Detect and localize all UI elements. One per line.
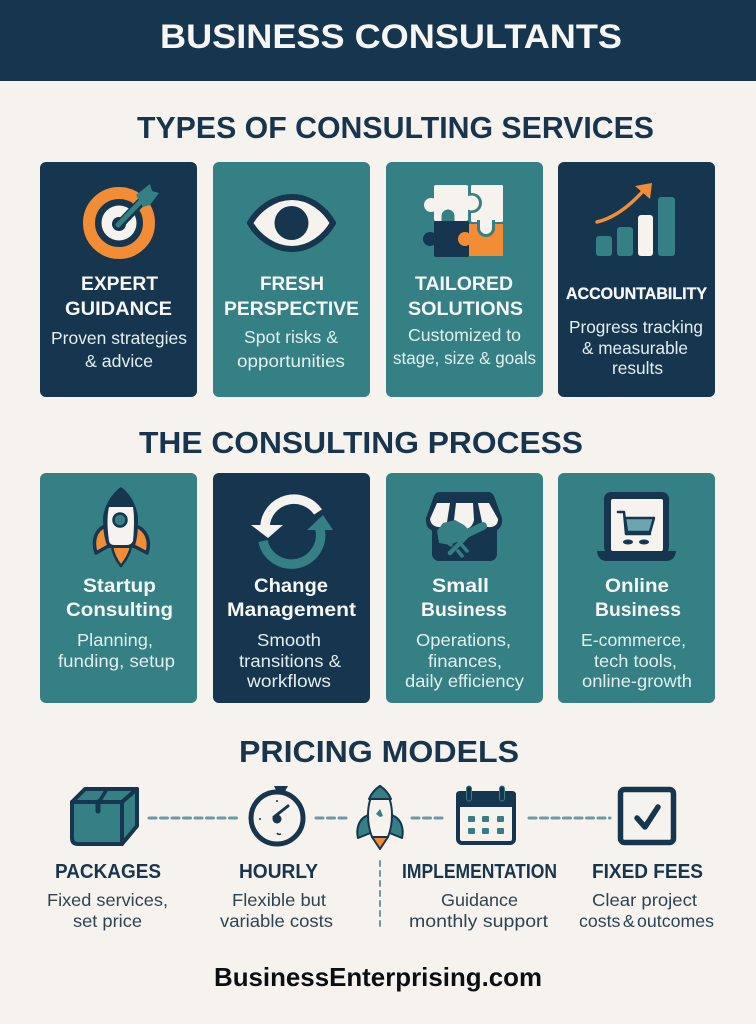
card text: E-commerce, xyxy=(581,630,686,650)
icon: cycle arrows xyxy=(251,499,333,564)
icon: stopwatch xyxy=(251,786,303,844)
icon: eye xyxy=(250,197,333,249)
item title: HOURLY xyxy=(239,861,319,883)
card title: Change xyxy=(254,575,328,597)
panel: expert guidance: GUIDANCE xyxy=(65,298,172,320)
item title: FIXED FEES xyxy=(592,861,703,883)
pricing: packages xyxy=(47,789,168,931)
footer: website: BusinessEnterprising.com xyxy=(214,962,542,992)
panel: expert guidance xyxy=(40,162,197,397)
panel: fresh perspective xyxy=(213,162,370,397)
panel: tailored solutions: stage, size & goals xyxy=(393,348,536,368)
card title: Startup xyxy=(83,575,156,597)
heading: types of consulting services: TYPES OF CONSULTING SERVICES xyxy=(137,110,654,145)
card text: Smooth xyxy=(257,630,321,650)
icon: rocket xyxy=(94,487,148,566)
panel: accountability: results xyxy=(612,358,663,378)
card text: Spot risks & xyxy=(244,327,338,347)
panel: change management: workflows xyxy=(246,671,331,691)
panel: startup consulting: funding, setup xyxy=(58,651,175,671)
card title: TAILORED xyxy=(415,273,513,295)
panel: online business: Business xyxy=(595,599,681,621)
panel: small business: Business xyxy=(421,599,507,621)
card text: Progress tracking xyxy=(569,317,703,337)
icon: target with dart xyxy=(89,184,159,253)
heading: the consulting process: THE CONSULTING PROCESS xyxy=(139,425,583,460)
panel: fresh perspective: opportunities xyxy=(237,351,345,371)
panel: small business xyxy=(386,473,543,703)
heading: pricing models: PRICING MODELS xyxy=(239,734,519,769)
card text: Planning, xyxy=(77,630,153,650)
pricing: implementation xyxy=(402,786,557,931)
card text: Operations, xyxy=(416,630,511,650)
icon: laptop with cart xyxy=(597,492,676,561)
item title: IMPLEMENTATION xyxy=(402,861,557,883)
icon: checkbox xyxy=(620,790,674,842)
pricing: hourly: variable costs xyxy=(220,911,333,931)
item text: Fixed services, xyxy=(47,890,168,910)
icon: calendar xyxy=(456,786,516,843)
card title: ACCOUNTABILITY xyxy=(566,284,708,303)
pricing: fixed fees xyxy=(579,790,714,931)
header banner xyxy=(0,0,756,81)
panel: online business: tech tools, xyxy=(594,651,677,671)
item text: Flexible but xyxy=(232,890,326,910)
pricing: implementation: monthly support xyxy=(409,911,548,931)
panel: change management xyxy=(213,473,370,703)
item text: Clear project xyxy=(592,890,697,910)
panel: change management: Management xyxy=(227,599,357,621)
panel: accountability: & measurable xyxy=(582,338,688,358)
card title: Online xyxy=(605,575,669,597)
icon: puzzle pieces xyxy=(423,185,503,257)
pricing: fixed fees: costs & outcomes xyxy=(579,911,714,931)
panel: tailored solutions xyxy=(386,162,543,397)
card title: EXPERT xyxy=(81,273,158,295)
connector: dashed lines xyxy=(149,818,610,927)
icon: growth chart xyxy=(596,183,675,256)
card title: Small xyxy=(432,575,489,597)
card text: Proven strategies xyxy=(51,328,187,348)
panel: online business: online-growth xyxy=(582,671,692,691)
icon: box xyxy=(72,789,137,844)
card text: Customized to xyxy=(408,325,521,345)
panel: tailored solutions: SOLUTIONS xyxy=(408,298,523,320)
panel: online business xyxy=(558,473,715,703)
pricing: hourly xyxy=(220,786,333,931)
card title: FRESH xyxy=(260,273,324,295)
panel: accountability xyxy=(558,162,715,397)
item text: Guidance xyxy=(441,890,518,910)
icon: storefront with handshake xyxy=(426,492,502,561)
panel: startup consulting xyxy=(40,473,197,703)
icon: rocket divider xyxy=(357,786,403,849)
item title: PACKAGES xyxy=(55,861,161,883)
panel: change management: transitions & xyxy=(239,651,341,671)
pricing: packages: set price xyxy=(73,911,142,931)
panel: small business: finances, xyxy=(428,651,502,671)
title: BUSINESS CONSULTANTS xyxy=(160,18,622,56)
panel: small business: daily efficiency xyxy=(405,671,524,691)
panel: expert guidance: & advice xyxy=(85,351,153,371)
panel: startup consulting: Consulting xyxy=(66,599,173,621)
panel: fresh perspective: PERSPECTIVE xyxy=(224,298,359,320)
